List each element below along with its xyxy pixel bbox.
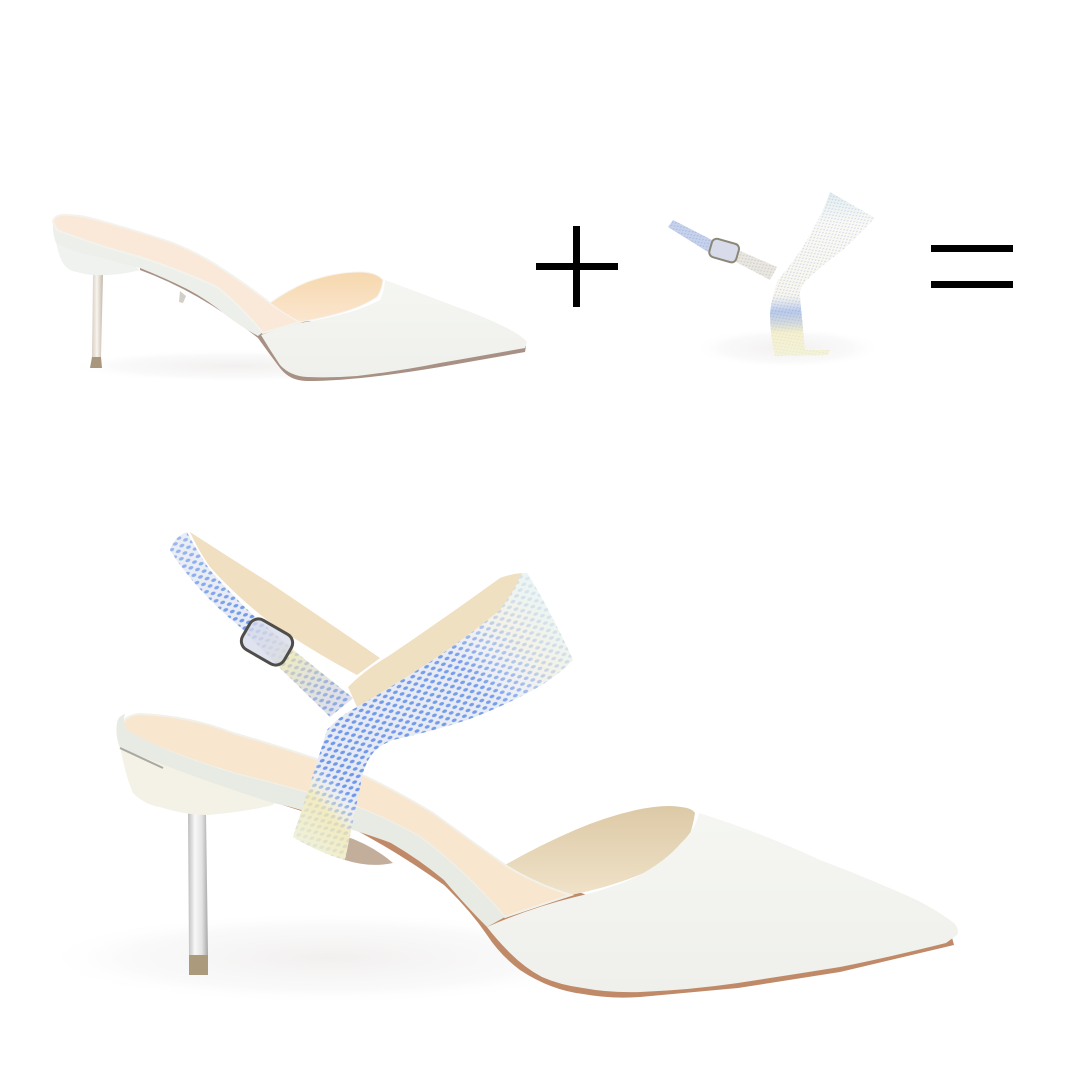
icon: combined slingback shoe [40,532,958,1004]
heel block [120,745,280,815]
vamp opening lining [505,806,695,895]
icon: detachable strap [668,192,883,368]
iridescent band [293,573,573,860]
icon: buckle [238,615,296,669]
buckle strap [170,532,353,717]
icon: mule shoe [53,215,527,382]
side wall [116,714,505,927]
back strap lining [190,532,380,675]
insole [123,714,571,917]
toe vamp [487,813,958,992]
stiletto heel [188,813,208,975]
icon: plus sign [536,226,618,307]
back strap underside [345,836,393,865]
sole [273,790,954,998]
icon: equals sign [931,245,1013,288]
band lining [348,573,522,707]
